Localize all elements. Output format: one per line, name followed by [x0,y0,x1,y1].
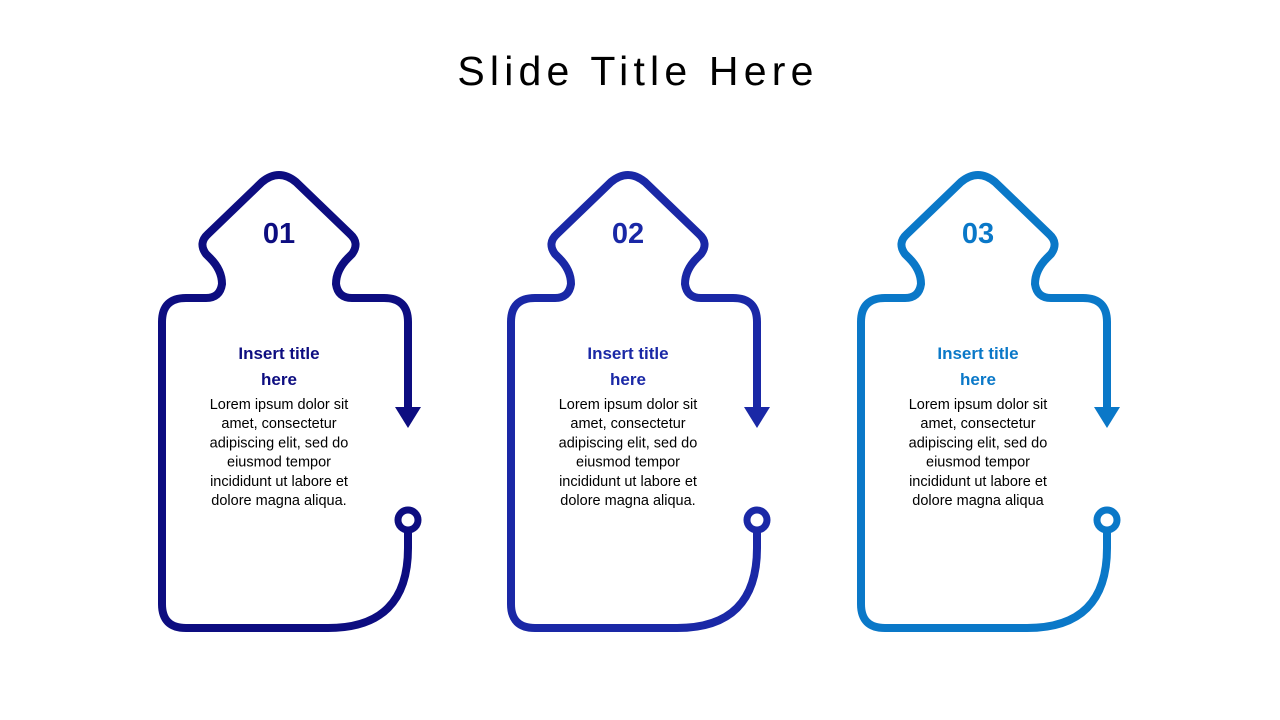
heading: here [261,370,297,389]
body text: Lorem ipsum dolor sit [909,397,1047,413]
body text: dolore magna aliqua [912,493,1045,509]
body text: adipiscing elit, sed do [559,435,697,451]
body text: amet, consectetur [570,416,686,432]
heading: here [960,370,996,389]
body text: incididunt ut labore et [559,474,697,490]
body text: dolore magna aliqua. [211,493,347,509]
body text: amet, consectetur [221,416,337,432]
body text: incididunt ut labore et [210,474,348,490]
body text: Lorem ipsum dolor sit [210,397,348,413]
body text: eiusmod tempor [576,455,680,471]
body text: eiusmod tempor [227,455,331,471]
body text: adipiscing elit, sed do [909,435,1047,451]
end circle [747,510,767,530]
title: Slide Title Here [457,48,819,94]
outline shape [511,175,757,628]
panel: 03 [861,175,1120,628]
end circle [1097,510,1117,530]
body text: dolore magna aliqua. [560,493,696,509]
body text: incididunt ut labore et [909,474,1047,490]
panel: 01 [162,175,421,628]
number: 03 [962,218,994,250]
arrow head [395,407,421,428]
outline shape [861,175,1107,628]
body text: Lorem ipsum dolor sit [559,397,697,413]
number: 01 [263,218,295,250]
body text: eiusmod tempor [926,455,1030,471]
heading: Insert title [587,344,669,363]
end circle [398,510,418,530]
heading: here [610,370,646,389]
panel: 02 [511,175,770,628]
arrow head [744,407,770,428]
heading: Insert title [238,344,320,363]
number: 02 [612,218,644,250]
arrow head [1094,407,1120,428]
body text: amet, consectetur [920,416,1036,432]
outline shape [162,175,408,628]
body text: adipiscing elit, sed do [210,435,348,451]
heading: Insert title [937,344,1019,363]
